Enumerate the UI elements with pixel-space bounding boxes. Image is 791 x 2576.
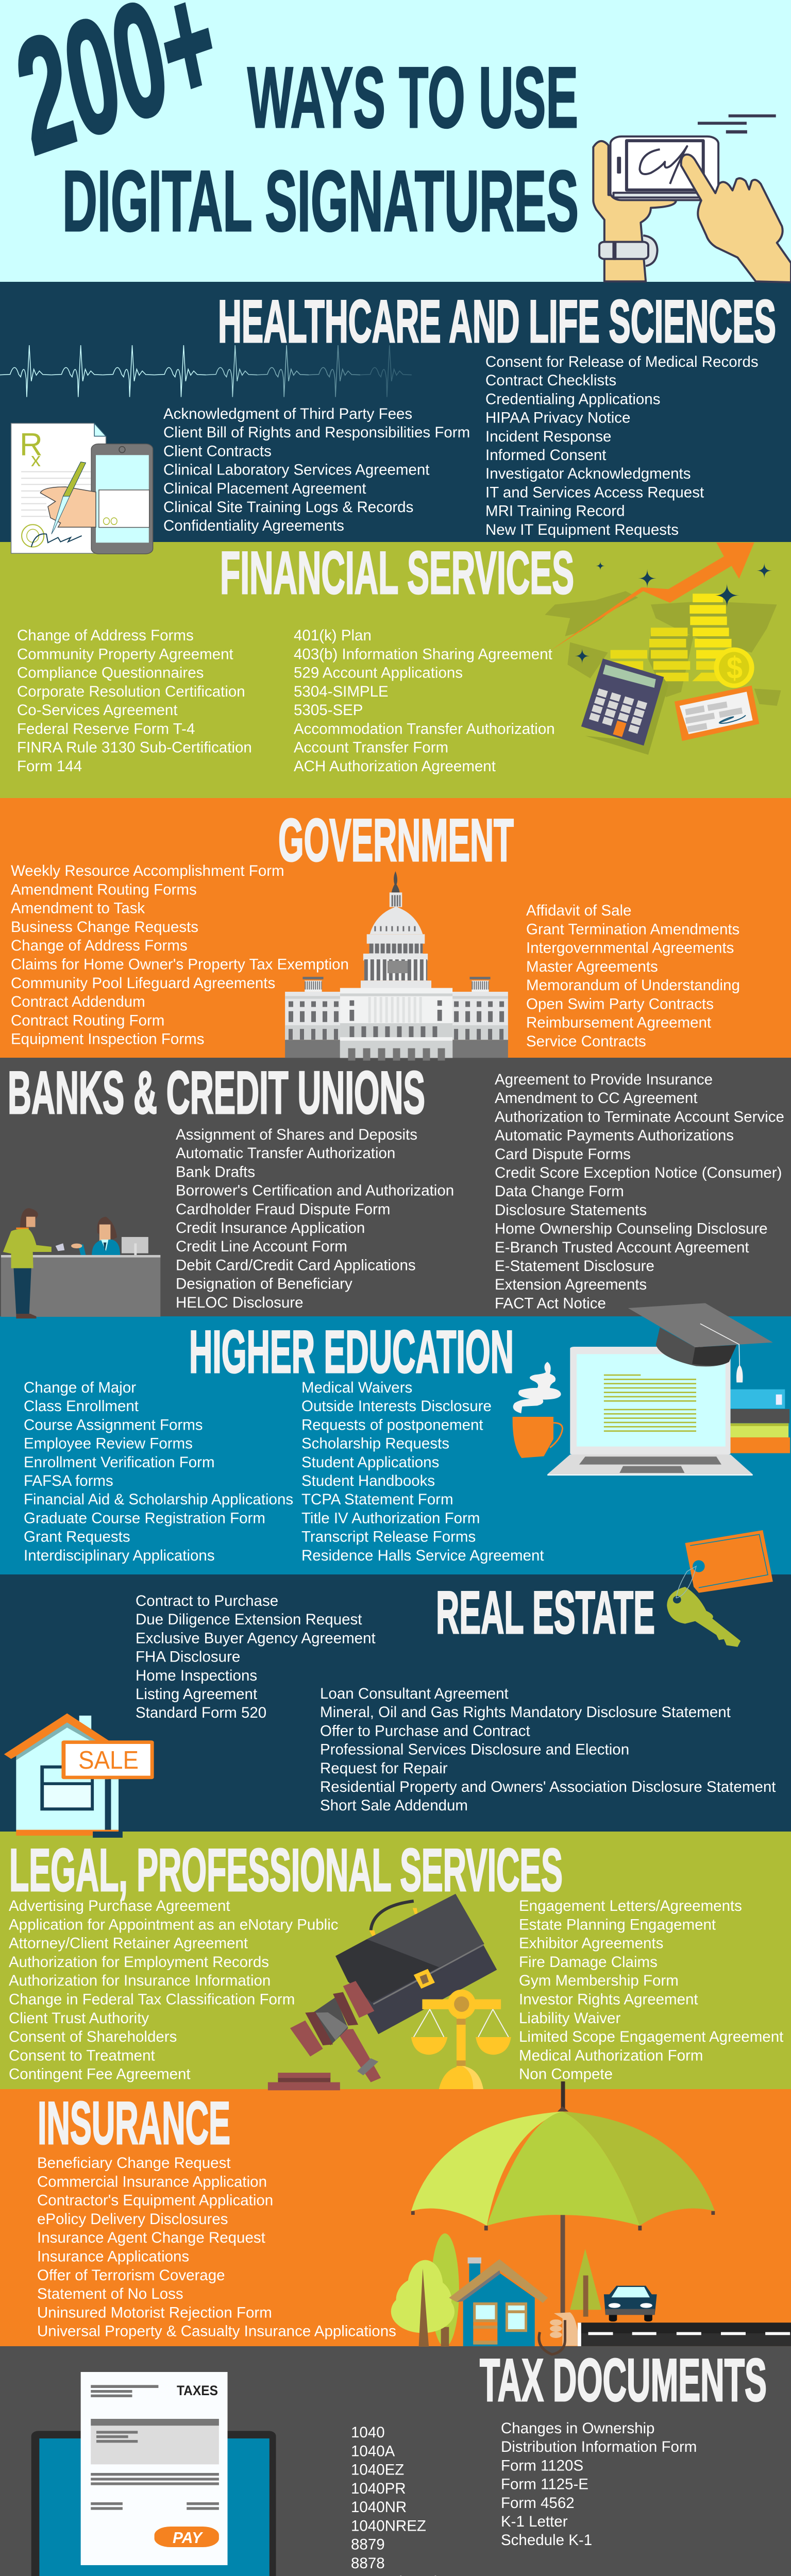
list: legal right: Exhibitor Agreements <box>519 1935 663 1952</box>
list: banks right: E-Branch Trusted Account Agreement <box>495 1239 749 1256</box>
list: government right: Grant Termination Amendments <box>526 921 739 938</box>
list: financial right: ACH Authorization Agreement <box>294 758 496 775</box>
list: higher education right: Outside Interests Disclosure <box>301 1398 492 1415</box>
list: healthcare left: Client Contracts <box>163 443 272 460</box>
list: government right: Service Contracts <box>526 1033 646 1050</box>
list: financial left: Co-Services Agreement <box>17 702 178 719</box>
list: financial left: Form 144 <box>17 758 82 775</box>
list: tax left: 1040NREZ <box>351 2517 426 2534</box>
list: government left: Equipment Inspection Forms <box>11 1031 204 1048</box>
list: banks right: Agreement to Provide Insurance <box>495 1071 713 1088</box>
list: higher education left: Course Assignment Forms <box>24 1416 203 1433</box>
list: financial left: FINRA Rule 3130 Sub-Certification <box>17 739 252 756</box>
list: insurance: Insurance Agent Change Request <box>37 2229 265 2246</box>
illustration: laptop with tax form: PAY <box>173 2529 204 2547</box>
list: higher education left: Interdisciplinary Applications <box>24 1547 215 1564</box>
list: real estate right: Offer to Purchase and Contract <box>320 1722 530 1739</box>
list: healthcare right: Investigator Acknowledgments <box>485 465 691 482</box>
list: healthcare right: MRI Training Record <box>485 503 625 520</box>
list: legal right: Gym Membership Form <box>519 1972 679 1989</box>
list: government right: Reimbursement Agreement <box>526 1014 711 1031</box>
list: legal left: Contingent Fee Agreement <box>9 2066 191 2083</box>
list: banks right: Card Dispute Forms <box>495 1146 631 1163</box>
list: banks right: Authorization to Terminate Account Service <box>495 1108 784 1125</box>
panel: insurance <box>0 2089 791 2346</box>
list: higher education right: Residence Halls Service Agreement <box>301 1547 544 1564</box>
list: legal right: Investor Rights Agreement <box>519 1991 698 2008</box>
list: tax left: 8879 <box>351 2536 385 2553</box>
list: tax left: 1040A <box>351 2443 395 2460</box>
heading: banks: BANKS & CREDIT UNIONS <box>8 1059 425 1126</box>
panel: healthcare and life sciences <box>0 282 791 542</box>
panel: banks and credit unions <box>0 1058 791 1316</box>
list: financial left: Federal Reserve Form T-4 <box>17 720 195 737</box>
list: financial right: 5304-SIMPLE <box>294 683 389 700</box>
list: real estate left: Contract to Purchase <box>136 1592 278 1609</box>
list: tax right: Form 4562 <box>501 2495 575 2512</box>
list: healthcare right: Credentialing Applications <box>485 391 660 408</box>
panel: higher education <box>0 1316 791 1574</box>
list: legal left: Authorization for Insurance Information <box>9 1972 271 1989</box>
list: higher education left: Grant Requests <box>24 1529 130 1546</box>
list: real estate right: Residential Property and Owners' Association Disclosure Statement <box>320 1778 776 1795</box>
list: financial right: 529 Account Applications <box>294 665 463 681</box>
list: legal left: Client Trust Authority <box>9 2010 149 2027</box>
list: real estate right: Short Sale Addendum <box>320 1797 468 1814</box>
list: real estate right: Professional Services Disclosure and Election <box>320 1741 629 1758</box>
panel: header <box>0 0 791 282</box>
list: financial left: Compliance Questionnaires <box>17 665 204 681</box>
list: government right: Open Swim Party Contracts <box>526 995 714 1012</box>
list: legal right: Estate Planning Engagement <box>519 1916 716 1933</box>
list: legal left: Application for Appointment as an eNotary Public <box>9 1916 339 1933</box>
list: government right: Master Agreements <box>526 958 658 975</box>
list: healthcare left: Clinical Site Training Logs & Records <box>163 499 413 516</box>
illustration: house for sale sign <box>4 1714 154 1838</box>
list: insurance: Uninsured Motorist Rejection Form <box>37 2304 272 2321</box>
list: government left: Contract Addendum <box>11 993 145 1010</box>
list: tax right: Form 1125-E <box>501 2476 588 2493</box>
illustration: capitol building <box>285 871 508 1058</box>
list: higher education left: Class Enrollment <box>24 1398 139 1415</box>
list: financial left: Corporate Resolution Certification <box>17 683 245 700</box>
list: real estate left: FHA Disclosure <box>136 1649 240 1666</box>
list: government left: Claims for Home Owner's Property Tax Exemption <box>11 956 349 973</box>
list: legal right: Liability Waiver <box>519 2010 620 2027</box>
heading: higher education: HIGHER EDUCATION <box>189 1318 514 1385</box>
illustration: finance chart, coins, calculator and tablet: $ <box>727 651 743 685</box>
list: tax right: Form 1120S <box>501 2457 583 2474</box>
list: government left: Change of Address Forms <box>11 937 188 954</box>
list: higher education right: Scholarship Requests <box>301 1435 449 1452</box>
list: insurance: Beneficiary Change Request <box>37 2155 231 2172</box>
list: healthcare left: Client Bill of Rights and Responsibilities Form <box>163 424 470 441</box>
list: banks left: Automatic Transfer Authorization <box>176 1145 395 1162</box>
list: higher education left: Enrollment Verification Form <box>24 1454 215 1471</box>
list: financial right: Account Transfer Form <box>294 739 448 756</box>
panel: financial services <box>0 539 791 798</box>
list: healthcare right: IT and Services Access Request <box>485 484 704 501</box>
panel: government <box>0 798 791 1058</box>
illustration: graduation cap, laptop, mug and books <box>513 1303 790 1476</box>
list: higher education right: Student Applications <box>301 1454 439 1471</box>
list: higher education left: Graduate Course Registration Form <box>24 1510 265 1527</box>
illustration: laptop with tax form <box>6 2372 304 2576</box>
list: tax left: 1040NR <box>351 2499 407 2516</box>
list: higher education left: Employee Review Forms <box>24 1435 193 1452</box>
list: banks right: Amendment to CC Agreement <box>495 1090 698 1107</box>
list: financial right: 401(k) Plan <box>294 627 372 644</box>
illustration: prescription document, phone and hand: R <box>20 427 43 463</box>
list: higher education right: Medical Waivers <box>301 1379 412 1396</box>
list: banks right: E-Statement Disclosure <box>495 1258 654 1275</box>
list: banks right: Extension Agreements <box>495 1276 647 1293</box>
chart: heartbeat line <box>0 345 412 397</box>
list: real estate right: Loan Consultant Agreement <box>320 1685 509 1702</box>
list: banks right: Home Ownership Counseling Disclosure <box>495 1221 768 1238</box>
list: real estate left: Exclusive Buyer Agency Agreement <box>136 1630 376 1647</box>
list: healthcare left: Clinical Placement Agreement <box>163 480 366 497</box>
list: banks left: Borrower's Certification and Authorization <box>176 1182 454 1199</box>
list: banks right: Data Change Form <box>495 1183 624 1200</box>
list: legal left: Authorization for Employment Records <box>9 1954 269 1971</box>
list: healthcare right: Contract Checklists <box>485 372 616 389</box>
list: insurance: ePolicy Delivery Disclosures <box>37 2211 228 2228</box>
list: financial right: 403(b) Information Sharing Agreement <box>294 646 552 663</box>
list: legal left: Change in Federal Tax Classification Form <box>9 1991 295 2008</box>
list: legal left: Attorney/Client Retainer Agreement <box>9 1935 248 1952</box>
list: government right: Intergovernmental Agreements <box>526 940 734 956</box>
list: higher education right: Student Handbooks <box>301 1472 435 1489</box>
list: tax left: 1040 <box>351 2424 385 2441</box>
list: higher education right: TCPA Statement Form <box>301 1491 453 1508</box>
list: insurance: Commercial Insurance Application <box>37 2173 267 2190</box>
list: healthcare right: New IT Equipment Requests <box>485 521 679 538</box>
list: insurance: Universal Property & Casualty Insurance Applications <box>37 2323 396 2340</box>
list: healthcare right: HIPAA Privacy Notice <box>485 410 630 427</box>
illustration: briefcase, gavel and scales <box>268 1894 511 2090</box>
illustration: prescription document, phone and hand <box>11 423 153 554</box>
list: banks left: Designation of Beneficiary <box>176 1276 352 1293</box>
list: real estate right: Mineral, Oil and Gas Rights Mandatory Disclosure Statement <box>320 1704 731 1721</box>
list: legal right: Fire Damage Claims <box>519 1954 658 1971</box>
list: tax left: 1040PR <box>351 2480 406 2497</box>
list: financial left: Change of Address Forms <box>17 627 194 644</box>
list: financial right: 5305-SEP <box>294 702 363 719</box>
list: legal right: Medical Authorization Form <box>519 2047 703 2064</box>
list: banks right: Automatic Payments Authorizations <box>495 1127 734 1144</box>
list: healthcare right: Consent for Release of Medical Records <box>485 353 759 370</box>
list: banks left: Assignment of Shares and Deposits <box>176 1126 417 1143</box>
list: real estate left: Due Diligence Extension Request <box>136 1611 362 1628</box>
list: higher education right: Title IV Authorization Form <box>301 1510 480 1527</box>
list: banks left: Bank Drafts <box>176 1163 255 1180</box>
list: tax right: Schedule K-1 <box>501 2532 592 2549</box>
list: government left: Amendment to Task <box>11 900 145 917</box>
list: real estate left: Listing Agreement <box>136 1686 257 1703</box>
list: insurance: Contractor's Equipment Application <box>37 2192 273 2209</box>
list: government left: Community Pool Lifeguard Agreements <box>11 975 275 992</box>
list: banks right: Disclosure Statements <box>495 1201 647 1218</box>
list: higher education right: Requests of postponement <box>301 1416 483 1433</box>
list: banks left: Credit Insurance Application <box>176 1219 365 1236</box>
illustration: bank counter with customer and teller <box>1 1208 160 1318</box>
list: banks left: Cardholder Fraud Dispute Form <box>176 1201 390 1218</box>
list: higher education left: Change of Major <box>24 1379 136 1396</box>
list: legal right: Limited Scope Engagement Agreement <box>519 2028 783 2045</box>
list: banks left: Credit Line Account Form <box>176 1238 347 1255</box>
list: banks right: FACT Act Notice <box>495 1295 606 1312</box>
list: insurance: Insurance Applications <box>37 2248 189 2265</box>
illustration: umbrella over house, trees and car <box>391 2081 791 2354</box>
panel: legal, professional services <box>0 1832 791 2089</box>
list: government left: Contract Routing Form <box>11 1012 164 1029</box>
list: real estate left: Home Inspections <box>136 1667 257 1684</box>
list: legal left: Consent of Shareholders <box>9 2028 177 2045</box>
list: healthcare left: Confidentiality Agreements <box>163 517 344 534</box>
list: financial left: Community Property Agreement <box>17 646 233 663</box>
list: government right: Affidavit of Sale <box>526 902 631 919</box>
panel: real estate <box>0 1574 791 1832</box>
list: legal right: Non Compete <box>519 2066 613 2083</box>
panel: tax documents <box>0 2346 791 2576</box>
list: government left: Business Change Requests <box>11 919 198 936</box>
list: legal right: Engagement Letters/Agreements <box>519 1897 742 1914</box>
list: tax right: Distribution Information Form <box>501 2438 697 2455</box>
list: healthcare right: Incident Response <box>485 428 611 445</box>
list: healthcare left: Acknowledgment of Third Party Fees <box>163 405 412 422</box>
list: government left: Weekly Resource Accomplishment Form <box>11 862 284 879</box>
list: legal left: Consent to Treatment <box>9 2047 155 2064</box>
list: insurance: Offer of Terrorism Coverage <box>37 2267 225 2284</box>
list: healthcare right: Informed Consent <box>485 447 606 464</box>
list: legal left: Advertising Purchase Agreement <box>9 1897 230 1914</box>
list: insurance: Statement of No Loss <box>37 2285 183 2302</box>
illustration: finance chart, coins, calculator and tablet <box>545 543 781 755</box>
list: tax left: 8878 <box>351 2555 385 2572</box>
list: higher education left: Financial Aid & Scholarship Applications <box>24 1491 293 1508</box>
illustration: orange tag and green key <box>667 1530 773 1647</box>
list: healthcare left: Clinical Laboratory Services Agreement <box>163 462 430 479</box>
list: real estate right: Request for Repair <box>320 1760 448 1777</box>
list: tax right: Changes in Ownership <box>501 2420 654 2437</box>
list: government left: Amendment Routing Forms <box>11 881 197 898</box>
illustration: prescription document, phone and hand: x <box>31 449 41 471</box>
list: banks right: Credit Score Exception Notice (Consumer) <box>495 1164 782 1181</box>
list: government right: Memorandum of Understanding <box>526 977 740 994</box>
list: financial right: Accommodation Transfer Authorization <box>294 720 555 737</box>
list: higher education right: Transcript Release Forms <box>301 1529 476 1546</box>
illustration: laptop with tax form: TAXES <box>177 2383 218 2398</box>
list: banks left: HELOC Disclosure <box>176 1294 304 1311</box>
list: banks left: Debit Card/Credit Card Applications <box>176 1257 416 1274</box>
list: tax right: K-1 Letter <box>501 2513 568 2530</box>
illustration: hands signing on phone <box>593 114 791 282</box>
list: real estate left: Standard Form 520 <box>136 1704 266 1721</box>
illustration: house for sale sign: SALE <box>78 1747 139 1774</box>
list: higher education left: FAFSA forms <box>24 1472 113 1489</box>
list: tax left: 1040EZ <box>351 2462 404 2478</box>
heading: insurance: INSURANCE <box>38 2089 230 2157</box>
heading: government: GOVERNMENT <box>278 806 514 874</box>
